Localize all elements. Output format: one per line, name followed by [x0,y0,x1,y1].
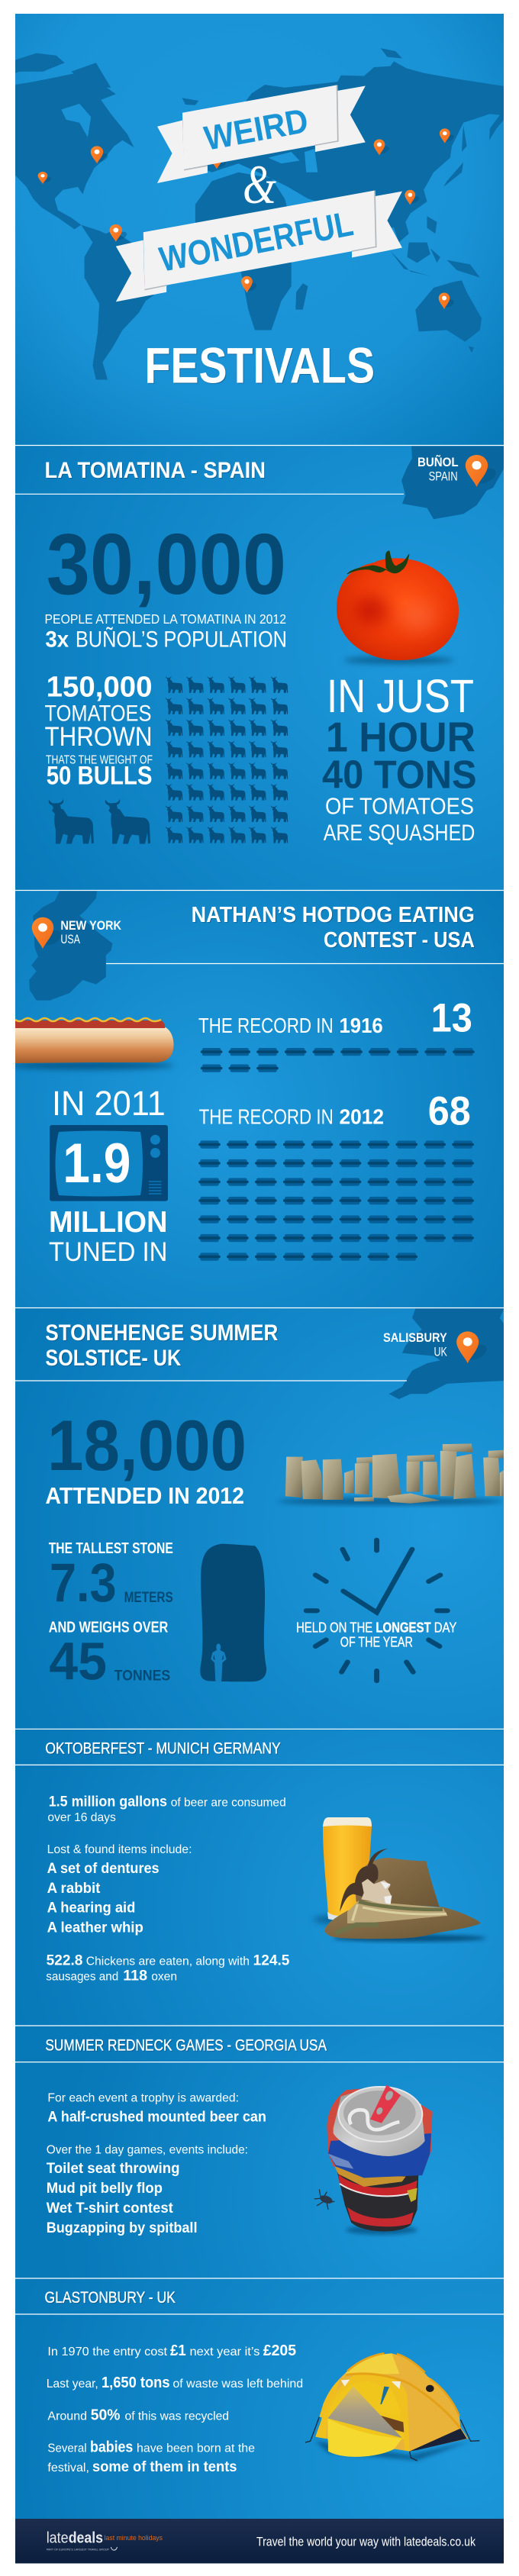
text: 3x population: 3x [45,627,69,652]
heading: festivals: FESTIVALS [145,338,375,394]
ribbon: weird [157,85,366,183]
text: waste: Last year, [47,2378,98,2391]
heading: la tomatina: LA TOMATINA - SPAIN [44,458,266,483]
text: in 2011: IN 2011 [52,1084,166,1123]
fly [314,2189,334,2210]
location label: bunol: SPAIN [429,469,458,483]
text: recycled: Around [47,2410,87,2423]
text: trophy: A half-crushed mounted beer can [47,2109,266,2125]
icons: grid of 48 bulls [166,676,288,843]
heading: redneck games: SUMMER REDNECK GAMES - GEORGIA USA [45,2036,327,2054]
footer [15,2519,504,2563]
ribbon text: weird: WEIRD [201,101,311,158]
pin: new york [32,917,64,949]
text: tallest stone: METERS [124,1590,173,1606]
heading: nathan's hotdog contest: CONTEST - USA [324,928,475,953]
ampersand: & [243,154,276,215]
list: lost and found: A hearing aid [47,1901,135,1917]
text: 3x population: BUÑOL’S POPULATION [76,626,287,652]
stat: 1.9: 1.9 [63,1133,131,1195]
logo: latedeals: last minute holidays [105,2534,163,2542]
text: beer gallons: over 16 days [47,1811,116,1824]
text: 150,000 tomatoes thrown [44,672,153,790]
text: chickens sausages oxen: sausages and [46,1970,118,1983]
location label: salisbury: SALISBURY [383,1330,447,1345]
text: entry cost: In 1970 the entry cost [47,2345,168,2358]
icon: television [50,1125,168,1201]
panel: oktoberfest [15,1729,504,2026]
panel: redneck games [15,2026,504,2278]
ribbon: wonderful [116,191,402,301]
pin: bunol [466,455,498,487]
footer tagline: Travel the world your way with latedeals.co.uk [256,2534,475,2549]
text: chickens sausages oxen [46,1952,290,1984]
world map [15,48,504,380]
logo: latedeals: PART OF EUROPE’S LARGEST TRAVEL GROUP [47,2548,109,2552]
text: in just 1 hour 40 tons: ARE SQUASHED [324,821,475,846]
text: weighs over: AND WEIGHS OVER [49,1620,169,1636]
list: lost and found [47,1843,192,1936]
text: 150,000 tomatoes thrown: THATS THE WEIGHT OF [46,754,153,766]
map: new york [29,891,112,1001]
record 1916: 1916 [339,1014,383,1037]
text: babies: festival, [47,2462,89,2474]
text: waste: of waste was left behind [172,2378,303,2391]
header lines [15,1308,504,1381]
list: events [47,2143,248,2236]
heading: stonehenge: STONEHENGE SUMMER [45,1320,279,1346]
text: in just 1 hour 40 tons: IN JUST [327,670,474,722]
list: lost and found: A rabbit [47,1881,101,1897]
text: 150,000 tomatoes thrown: TOMATOES [44,701,151,726]
text: 150,000 tomatoes thrown: 150,000 [47,672,153,704]
text: recycled: 50% [91,2407,121,2423]
text: trophy [47,2091,266,2125]
ribbon text: wonderful: WONDERFUL [156,203,356,279]
text: 150,000 tomatoes thrown: 50 BULLS [47,761,153,790]
text: tallest stone: THE TALLEST STONE [49,1540,173,1557]
text: tallest stone [49,1540,173,1614]
text: 150,000 tomatoes thrown: THROWN [44,722,153,752]
text: waste [47,2374,303,2391]
location label: bunol: BUÑOL [417,454,459,469]
panel: hotdog contest [9,890,504,1308]
text: million tuned in: TUNED IN [49,1236,167,1267]
text: chickens sausages oxen: 118 [123,1968,147,1984]
text: waste: 1,650 tons [102,2374,169,2391]
record 2012: 2012 [339,1105,384,1129]
crushed beer can [327,2085,433,2235]
stat: 30,000: 30,000 [47,516,286,612]
text: trophy: For each event a trophy is awarded: [47,2091,239,2104]
stonehenge stones [278,1443,504,1505]
record 1916 [198,1003,472,1033]
text: in just 1 hour 40 tons [322,670,476,846]
text: weighs over: 45 [49,1632,107,1691]
text: chickens sausages oxen: oxen [151,1970,177,1983]
text: babies: Several [47,2442,87,2455]
text: entry cost: next year it’s [189,2345,260,2358]
heading: oktoberfest: OKTOBERFEST - MUNICH GERMANY [45,1740,281,1757]
location label: bunol [418,455,458,481]
header lines [15,1729,504,1765]
text: longest day [296,1620,456,1650]
text: entry cost: £1 [170,2342,186,2359]
list: lost and found: A leather whip [47,1920,143,1936]
text: weighs over [49,1620,170,1691]
icons: 13 hotdogs [201,1048,475,1072]
map: spain [401,447,504,519]
list: events: Over the 1 day games, events include: [47,2143,248,2156]
record 2012: 68 [428,1088,471,1133]
record 1916: THE RECORD IN [198,1014,334,1037]
text: babies: have been born at the [137,2442,255,2455]
text: recycled: of this was recycled [125,2410,229,2423]
record 2012 [199,1096,470,1125]
icon: clock [306,1540,447,1681]
header lines [15,2026,504,2062]
text: beer gallons: of beer are consumed [171,1797,286,1810]
text: chickens sausages oxen: Chickens are eaten, along with [86,1955,250,1968]
text: in just 1 hour 40 tons: 1 HOUR [326,714,475,760]
text: chickens sausages oxen: 124.5 [253,1952,290,1969]
list: lost and found: A set of dentures [47,1861,160,1877]
heading: nathan's hotdog contest: NATHAN’S HOTDOG EATING [192,903,475,927]
panel: stonehenge [15,1308,504,1729]
list: events: Wet T-shirt contest [47,2200,173,2217]
map pins [38,128,455,309]
location label: new york [61,920,121,943]
text: in just 1 hour 40 tons: OF TOMATOES [325,793,474,820]
hotdog [9,1018,174,1069]
icons: two large bulls [49,798,150,844]
location label: new york: USA [60,932,80,946]
map: uk [389,1309,504,1399]
tent [305,2353,479,2461]
location label: salisbury [383,1330,447,1359]
heading: stonehenge: SOLSTICE- UK [45,1346,181,1371]
text: tallest stone: 7.3 [50,1553,117,1614]
text: longest day: OF THE YEAR [340,1634,413,1650]
logo: latedeals: deals [69,2530,103,2547]
header lines [15,2278,504,2314]
panel: la tomatina [15,446,504,890]
panel: title [15,14,504,446]
heading: stonehenge [45,1320,279,1371]
location label: salisbury: UK [434,1345,447,1359]
text: weighs over: TONNES [114,1668,170,1684]
text: chickens sausages oxen: 522.8 [47,1952,82,1969]
location label: new york: NEW YORK [60,918,122,933]
record 1916: 13 [431,996,472,1041]
logo: latedeals [47,2530,163,2552]
text: 3x population [46,627,285,647]
text: people attended: PEOPLE ATTENDED LA TOMATINA IN 2012 [44,611,286,627]
header lines [15,446,504,494]
text: beer gallons [47,1794,286,1824]
text: attended in 2012: ATTENDED IN 2012 [45,1483,244,1509]
stat: 18,000: 18,000 [47,1405,247,1485]
pin: salisbury [456,1331,489,1363]
text: babies [47,2439,255,2475]
text: million tuned in: MILLION [49,1206,167,1239]
heading: nathan's hotdog contest [192,907,475,948]
tomato [337,551,459,664]
text: million tuned in [49,1211,166,1261]
text: babies: some of them in tents [92,2459,237,2475]
icon: standing stone and person [200,1544,266,1681]
text: babies: babies [90,2439,133,2456]
panel: glastonbury [15,2278,504,2519]
list: lost and found: Lost & found items include: [47,1843,192,1856]
icons: 68 hotdogs [198,1140,474,1261]
header lines [15,890,504,963]
list: events: Mud pit belly flop [47,2181,163,2197]
logo: latedeals: late [47,2530,69,2547]
list: events: Toilet seat throwing [47,2161,180,2177]
text: recycled [47,2407,229,2423]
record 2012: THE RECORD IN [199,1105,334,1129]
heading: glastonbury: GLASTONBURY - UK [44,2289,176,2307]
text: beer gallons: 1.5 million gallons [49,1794,167,1810]
text: entry cost: £205 [263,2342,296,2359]
alpine hat [324,1849,486,1942]
text: longest day: HELD ON THE LONGEST DAY [296,1620,456,1636]
text: in just 1 hour 40 tons: 40 TONS [322,752,476,796]
text: entry cost [47,2342,296,2359]
list: events: Bugzapping by spitball [47,2220,198,2236]
beer glass [313,1817,405,1926]
